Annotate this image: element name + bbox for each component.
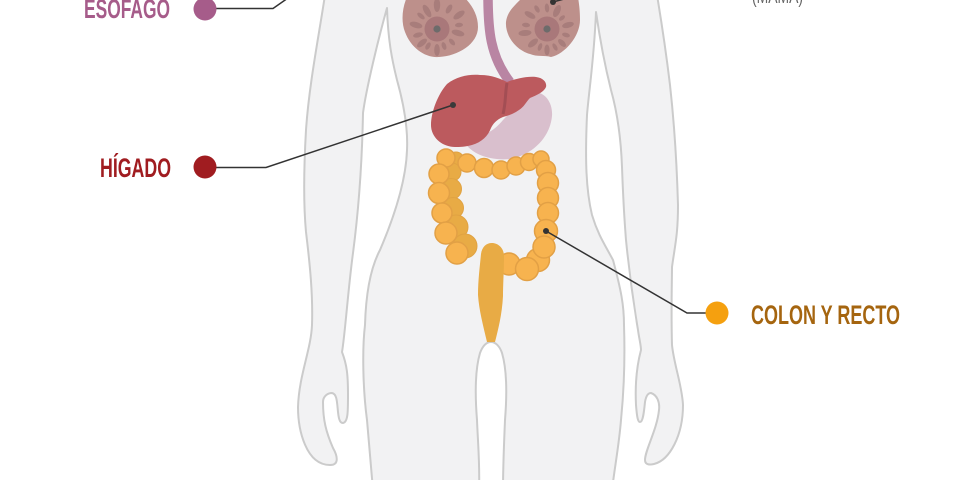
body silhouette	[298, 0, 683, 480]
leader line: esophagus	[216, 0, 288, 8]
organ: stomach	[465, 92, 552, 159]
label: colon and rectum: COLON Y RECTO	[751, 300, 900, 330]
leader line: liver	[216, 102, 456, 168]
leader line: colon and rectum	[543, 228, 706, 313]
marker: colon and rectum	[706, 302, 728, 324]
marker: esophagus	[194, 0, 216, 20]
organ: liver	[431, 75, 546, 147]
label: liver: HÍGADO	[100, 152, 171, 183]
organ: left breast	[403, 0, 478, 57]
organ: rectum	[478, 243, 504, 342]
leader line: breast	[550, 0, 564, 5]
organ: right breast	[506, 0, 580, 57]
organ: esophagus	[488, 0, 510, 82]
marker: liver	[194, 156, 216, 178]
organ: colon	[428, 149, 558, 280]
